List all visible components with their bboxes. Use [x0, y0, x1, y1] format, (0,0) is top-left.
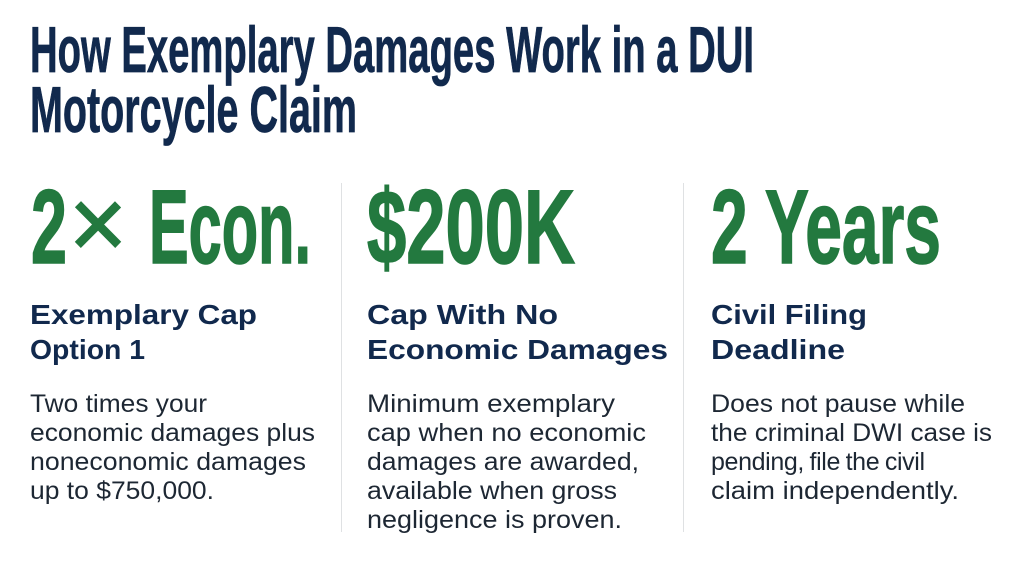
text block: no economic damages description: cap when no economic: [367, 419, 646, 447]
big stat: 2x Econ.: [31, 168, 311, 286]
panel: cap with no economic damages: [367, 169, 668, 534]
heading: exemplary cap option 1: [30, 299, 257, 365]
text block: no economic damages description: damages are awarded,: [367, 448, 639, 476]
text block: option 1 description: Two times your: [30, 390, 207, 418]
text block: deadline description: claim independently.: [711, 477, 959, 505]
heading: civil filing deadline: [711, 299, 867, 365]
text block: no economic damages description: Minimum exemplary: [367, 390, 616, 418]
title: Motorcycle Claim: [30, 73, 357, 146]
heading: cap with no economic damages: Cap With No: [367, 299, 558, 330]
text block: no economic damages description: [367, 390, 646, 534]
text block: deadline description: Does not pause while: [711, 390, 965, 418]
big stat: $200K: $200K: [367, 169, 575, 286]
text block: no economic damages description: available when gross: [367, 477, 617, 505]
heading: cap with no economic damages: Economic Damages: [367, 334, 668, 365]
big stat: 2x Econ.: ×: [69, 168, 127, 280]
title: [30, 13, 754, 146]
big stat: 2x Econ.: 2: [31, 169, 67, 286]
text block: deadline description: [711, 390, 992, 505]
text block: option 1 description: up to $750,000.: [30, 477, 214, 505]
text block: option 1 description: [30, 390, 315, 505]
heading: civil filing deadline: Civil Filing: [711, 299, 867, 330]
text block: no economic damages description: negligence is proven.: [367, 506, 622, 534]
heading: civil filing deadline: Deadline: [711, 334, 845, 365]
panel: civil filing deadline: [711, 169, 992, 505]
text block: deadline description: the criminal DWI case is: [711, 419, 992, 447]
text block: option 1 description: noneconomic damages: [30, 448, 306, 476]
panel: exemplary cap option 1: [30, 168, 315, 505]
heading: exemplary cap option 1: Exemplary Cap: [30, 299, 257, 330]
text block: option 1 description: economic damages plus: [30, 419, 315, 447]
text block: deadline description: pending, file the civil: [711, 448, 925, 476]
big stat: 2x Econ.: Econ.: [149, 169, 311, 286]
heading: exemplary cap option 1: Option 1: [30, 334, 145, 365]
heading: cap with no economic damages: [367, 299, 668, 365]
